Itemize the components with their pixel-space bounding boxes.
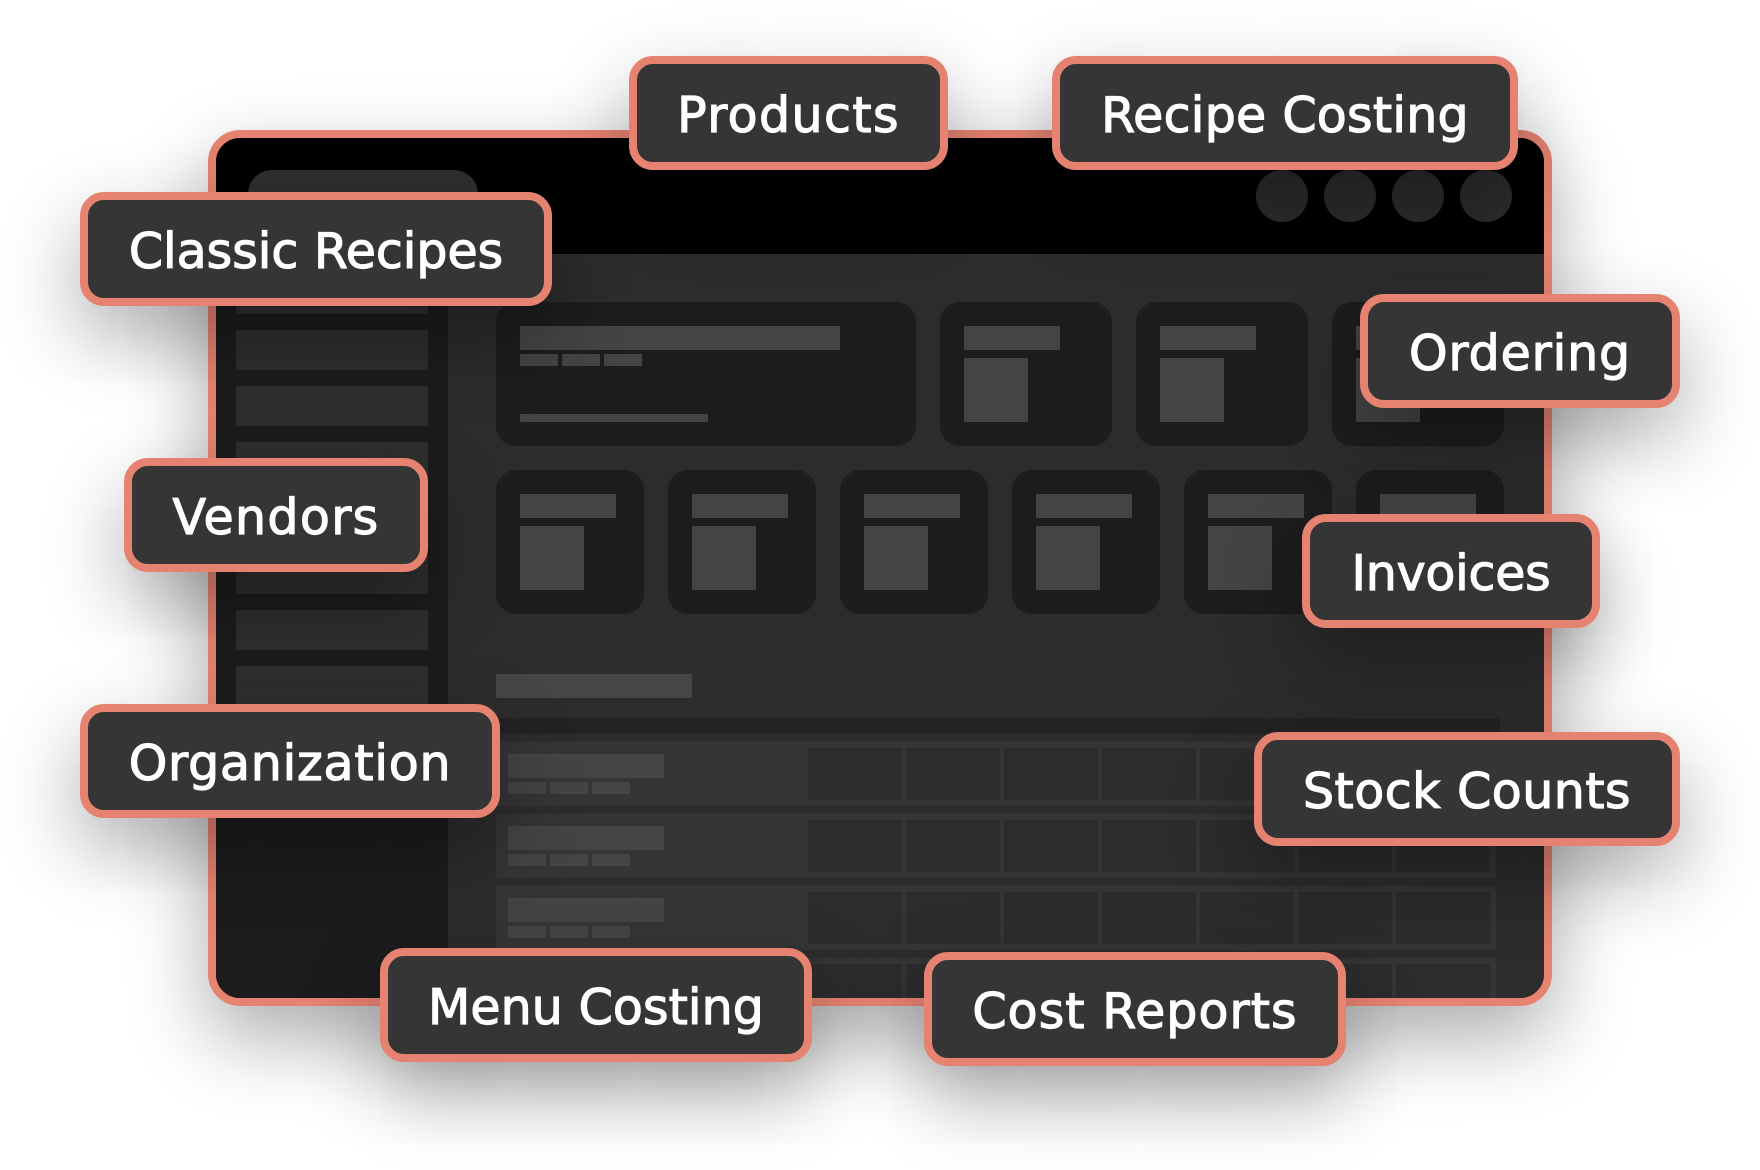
panel: app window mockup <box>208 130 1552 1006</box>
label: Vendors <box>124 458 428 572</box>
label: Ordering: Ordering <box>1409 324 1631 382</box>
sidebar <box>216 254 448 998</box>
table <box>496 718 1500 998</box>
label: Organization <box>80 704 500 818</box>
table row 3 <box>496 886 1496 950</box>
summary card row <box>496 302 1504 446</box>
label: Invoices: Invoices <box>1352 544 1550 602</box>
table row 2 <box>496 814 1496 878</box>
main content area <box>448 254 1544 998</box>
label: Products: Products <box>677 86 900 144</box>
section heading placeholder <box>496 674 692 698</box>
label: Stock Counts <box>1254 732 1680 846</box>
header bar <box>216 138 1544 254</box>
table row 1 <box>496 742 1496 806</box>
label: Classic Recipes: Classic Recipes <box>129 222 503 280</box>
label: Recipe Costing: Recipe Costing <box>1101 86 1469 144</box>
label: Cost Reports <box>924 952 1346 1066</box>
label: Ordering <box>1360 294 1680 408</box>
label: Invoices <box>1302 514 1600 628</box>
label: Cost Reports: Cost Reports <box>972 982 1298 1040</box>
label: Organization: Organization <box>129 734 451 792</box>
label: Vendors: Vendors <box>172 488 380 546</box>
label: Menu Costing: Menu Costing <box>428 978 764 1036</box>
label: Classic Recipes <box>80 192 552 306</box>
header icons <box>1256 170 1512 222</box>
table row 4 <box>496 958 1496 998</box>
label: Stock Counts: Stock Counts <box>1303 762 1631 820</box>
tile row <box>496 470 1504 614</box>
label: Recipe Costing <box>1052 56 1518 170</box>
label: Menu Costing <box>380 948 812 1062</box>
label: Products <box>629 56 948 170</box>
logo placeholder <box>248 170 478 222</box>
